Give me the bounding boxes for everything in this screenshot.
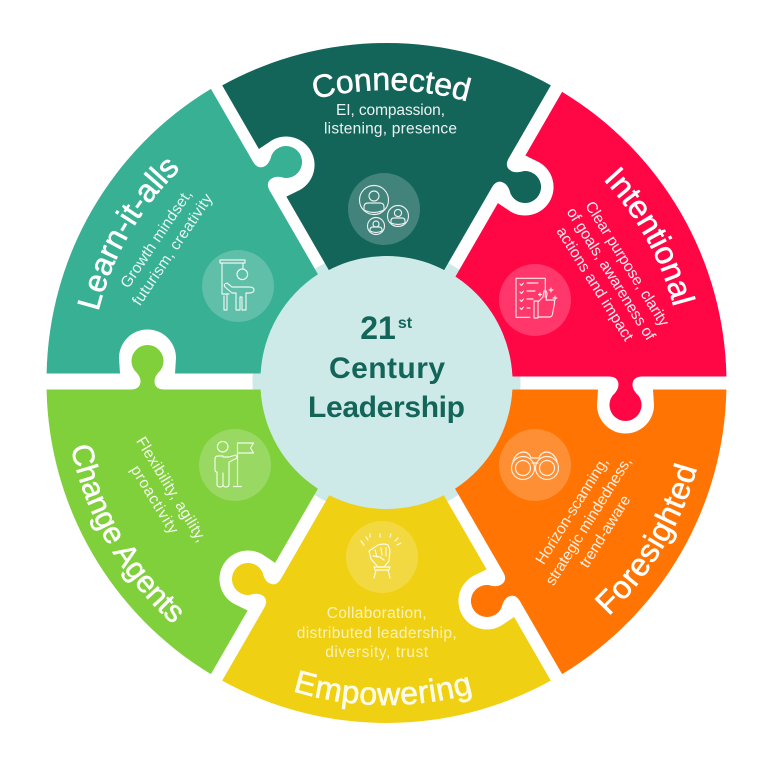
icon: checklist and thumbs up (499, 264, 571, 336)
panel: Foresighted (455, 390, 726, 674)
description: Change Agents: Flexibility, agility, (132, 434, 209, 545)
title line: 21st: st (398, 315, 413, 332)
panel: Empowering (222, 495, 551, 723)
description: Intentional: of goals, awareness of (563, 205, 659, 344)
panel: Connected (222, 43, 551, 270)
description: Foresighted (526, 444, 652, 599)
heading: Connected: Connected (313, 72, 472, 102)
icon: presenter at board (202, 250, 274, 322)
heading: Foresighted: Foresighted (594, 463, 697, 615)
description: Learn-it-alls: Growth mindset, (117, 187, 196, 291)
description: Empowering: Collaboration, (327, 605, 427, 622)
title line: Leadership: Leadership (308, 391, 465, 424)
icon: raised fist (346, 521, 418, 593)
heading: Empowering: Empowering (294, 670, 472, 710)
description: Intentional (547, 195, 675, 354)
description: Change Agents: proactivity (127, 463, 182, 537)
description: Foresighted: Horizon-scanning, (533, 454, 612, 568)
heading: Change Agents: Change Agents (72, 445, 182, 622)
description: Empowering: diversity, trust (325, 644, 429, 661)
icon: binoculars (499, 429, 571, 501)
panel: Intentional (456, 92, 726, 421)
description: Connected: listening, presence (324, 120, 457, 138)
panel: Learn-it-alls (46, 88, 318, 374)
title line: 21st (360, 310, 413, 346)
description: Foresighted: strategic mindedness, (542, 454, 635, 589)
title line: Century: Century (329, 352, 445, 385)
center backing disc (252, 248, 520, 516)
icon: person with flag (199, 429, 271, 501)
description: Foresighted: trend-aware (577, 492, 634, 571)
title line: 21st: 21 (360, 310, 396, 346)
center title: 21st Century Leadership (260, 256, 512, 508)
description: Learn-it-alls: futurism, creativity (129, 191, 217, 309)
heading: Intentional: Intentional (604, 166, 696, 306)
description: Intentional: Clear purpose, clarity (581, 198, 672, 330)
icon: connected people (348, 173, 420, 245)
description: Connected (324, 102, 457, 138)
heading: Learn-it-alls: Learn-it-alls (77, 160, 178, 310)
description: Intentional: actions and impact (553, 224, 637, 345)
description: Empowering: distributed leadership, (297, 625, 457, 642)
panel: Change Agents (46, 345, 318, 674)
description: Empowering (297, 605, 457, 661)
description: Connected: EI, compassion, (336, 102, 445, 119)
